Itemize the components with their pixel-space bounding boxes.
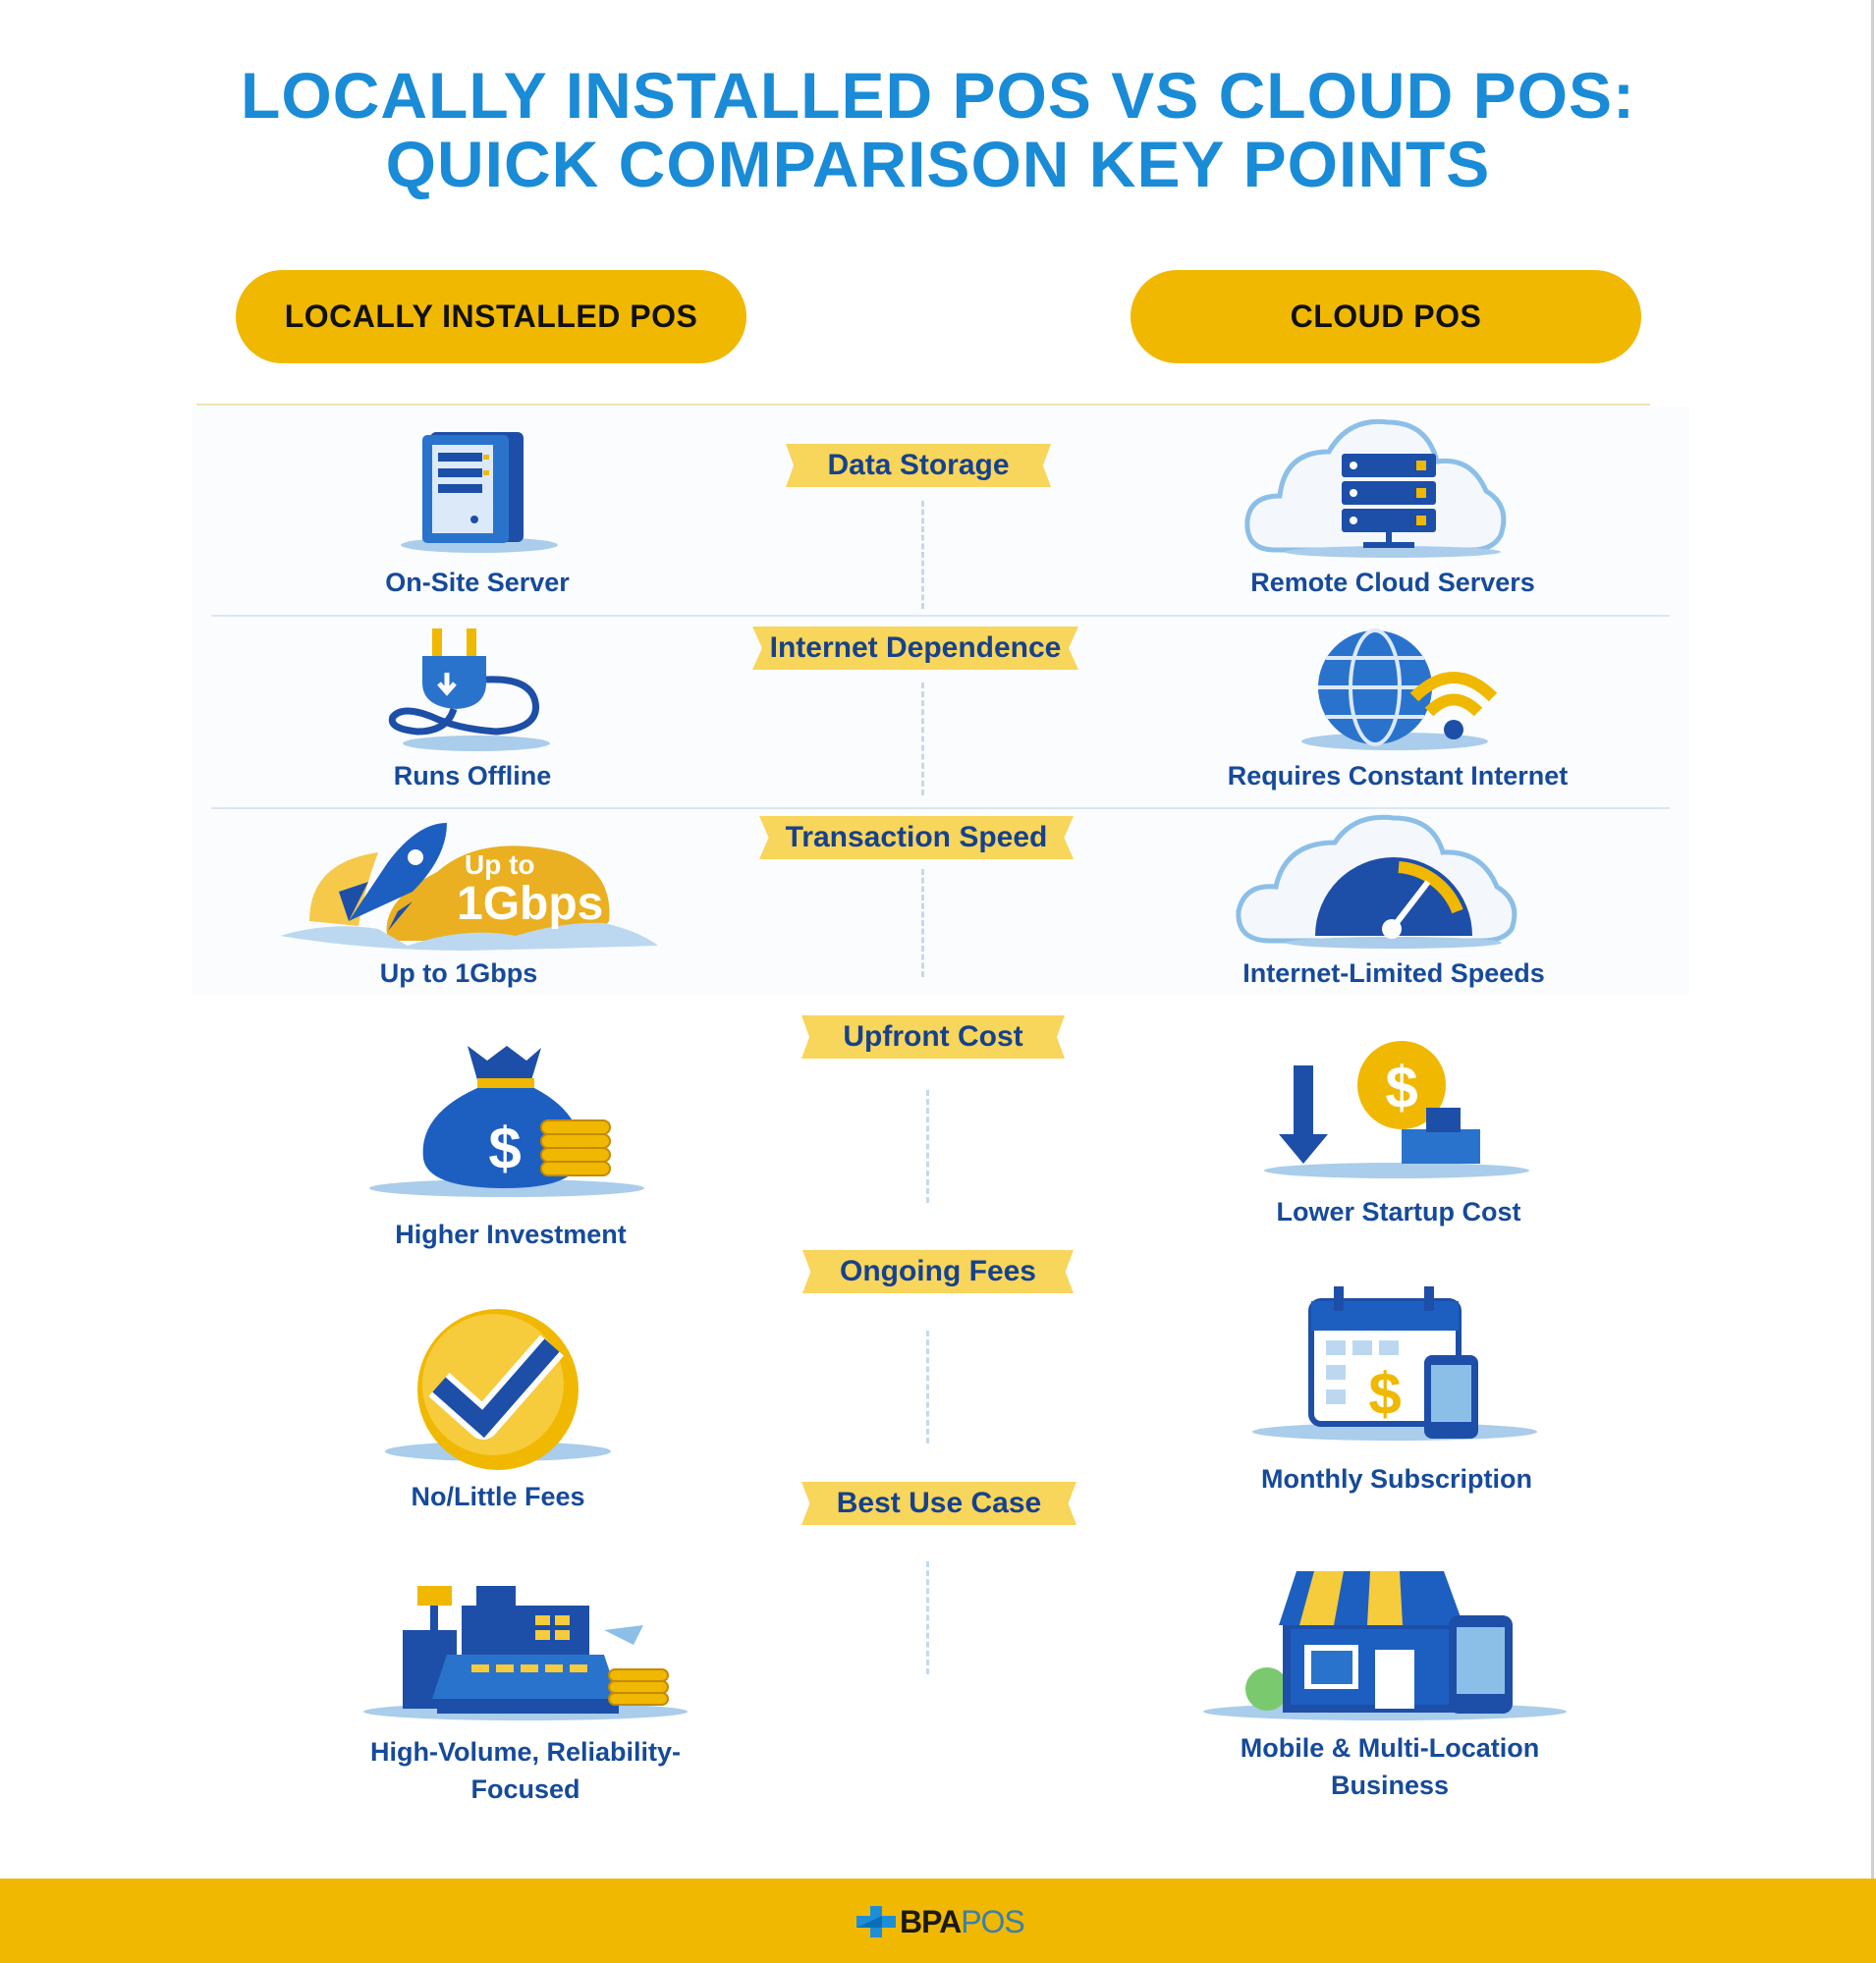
title: QUICK COMPARISON KEY POINTS	[386, 128, 1490, 200]
icon: shop and phone	[1203, 1571, 1567, 1720]
label: internet dependence: Internet Dependence	[770, 631, 1061, 664]
pill: locally installed pos	[236, 270, 746, 363]
pill: cloud pos: CLOUD POS	[1291, 299, 1481, 334]
icon: plug	[389, 628, 550, 751]
panel: light background rows	[192, 407, 1689, 996]
label: upfront cost: Upfront Cost	[843, 1020, 1023, 1053]
caption: no/little fees: No/Little Fees	[411, 1482, 585, 1511]
icon: on-site server	[401, 432, 558, 553]
label: data storage	[786, 444, 1051, 487]
title	[241, 59, 1635, 200]
caption: mobile & multi-location business: Mobile & Multi-Location	[1241, 1733, 1539, 1763]
icon: calendar subscription: $	[1368, 1361, 1402, 1427]
caption: remote cloud servers: Remote Cloud Servers	[1250, 568, 1535, 597]
logo: bpapos: BPAPOS	[900, 1904, 1024, 1939]
caption: mobile & multi-location business: Business	[1331, 1771, 1449, 1800]
caption: monthly subscription: Monthly Subscription	[1261, 1464, 1532, 1494]
caption: mobile & multi-location business	[1241, 1733, 1539, 1800]
caption: up to 1gbps: Up to 1Gbps	[380, 958, 537, 988]
icon: rocket 1gbps: Up to	[465, 849, 535, 880]
caption: requires constant internet: Requires Constant Internet	[1228, 761, 1568, 791]
label: best use case: Best Use Case	[837, 1487, 1041, 1519]
icon: cash register	[363, 1586, 688, 1720]
label: internet dependence	[752, 627, 1078, 670]
caption: high-volume, reliability-focused	[370, 1737, 681, 1804]
label: transaction speed	[759, 816, 1074, 859]
pill: locally installed pos: LOCALLY INSTALLED POS	[285, 299, 697, 334]
icon: globe wifi	[1301, 628, 1497, 750]
label: upfront cost	[801, 1015, 1065, 1059]
footer	[0, 1879, 1876, 1963]
icon: lower startup cost	[1264, 1041, 1529, 1178]
caption: high-volume, reliability-focused: High-Volume, Reliability-	[370, 1737, 681, 1767]
label: best use case	[801, 1482, 1076, 1525]
caption: runs offline: Runs Offline	[394, 761, 551, 791]
icon: remote cloud servers	[1244, 418, 1507, 558]
caption: internet-limited speeds: Internet-Limited Speeds	[1242, 958, 1545, 988]
icon: rocket 1gbps: 1Gbps	[457, 878, 603, 930]
label: transaction speed: Transaction Speed	[786, 821, 1047, 853]
icon: lower startup cost: $	[1385, 1055, 1418, 1120]
caption: higher investment: Higher Investment	[395, 1220, 627, 1249]
pill: cloud pos	[1131, 270, 1641, 363]
title: LOCALLY INSTALLED POS VS CLOUD POS:	[241, 59, 1635, 132]
caption: on-site server: On-Site Server	[385, 568, 570, 597]
icon: checkmark	[385, 1309, 611, 1470]
icon: gauge cloud	[1236, 815, 1517, 949]
caption: lower startup cost: Lower Startup Cost	[1276, 1197, 1520, 1227]
icon: money bag: $	[488, 1116, 522, 1181]
label: ongoing fees	[802, 1250, 1074, 1293]
icon: rocket 1gbps	[280, 823, 658, 951]
caption: high-volume, reliability-focused: Focused	[470, 1774, 580, 1804]
label: data storage: Data Storage	[827, 449, 1010, 481]
label: ongoing fees: Ongoing Fees	[840, 1255, 1036, 1287]
icon: money bag	[369, 1046, 644, 1197]
icon: calendar subscription	[1252, 1286, 1537, 1441]
